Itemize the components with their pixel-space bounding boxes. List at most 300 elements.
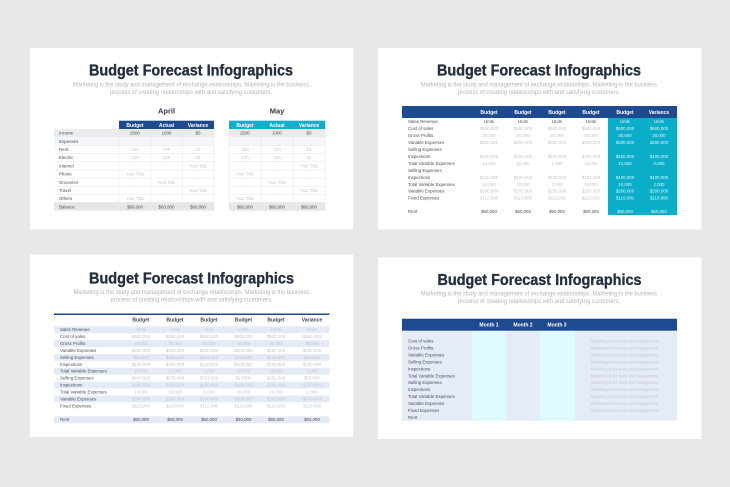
row labels: Selling Expenses	[60, 355, 94, 360]
table header labels	[132, 318, 323, 324]
column 4 values: Units	[586, 119, 597, 124]
column 5 values: $60,000	[268, 417, 284, 422]
column 3 values: $200,000	[548, 140, 567, 145]
column 2 values: $110,000	[514, 196, 533, 201]
column 2 values	[514, 119, 533, 214]
row labels: Cost of sales	[408, 338, 434, 344]
column 3 values	[548, 119, 567, 214]
column 5 values: $200,000	[616, 140, 635, 145]
April values: -	[197, 172, 199, 177]
column 3 values: $194,000	[200, 355, 219, 360]
column 1 values: $200,000	[132, 396, 151, 401]
column 3 values: $60,000	[201, 417, 217, 422]
row labels: Rent	[60, 417, 70, 422]
column 5 values	[267, 327, 286, 422]
column 1 values: $200,000	[480, 189, 499, 194]
subtitle: Marketing is the study and management of exchange relationships. Marketing is the business	[74, 289, 310, 296]
panel: April and May budget tables	[30, 48, 353, 230]
column 5 values: 10,000	[269, 369, 283, 374]
column 3 values: $100,000	[200, 362, 219, 367]
column 2 values: $200,000	[166, 348, 185, 353]
May values: 1000	[272, 131, 282, 136]
heading: May: May	[270, 106, 285, 116]
row labels: Inspections	[60, 362, 83, 367]
row labels: Rent	[408, 209, 418, 214]
column 1 values: $100,000	[132, 383, 151, 388]
variance values: $60,000	[651, 209, 667, 214]
row labels: Cost of sales	[60, 334, 86, 339]
column 2 values: $500,000	[166, 334, 185, 339]
April values: -	[197, 180, 199, 185]
row labels: Groceries	[59, 180, 79, 185]
column 1 values: $200,000	[480, 140, 499, 145]
column 4 values: $100,000	[234, 362, 253, 367]
row labels: Variable Expenses	[408, 352, 445, 357]
column 2 values: $60,000	[167, 417, 183, 422]
variance values: Units	[307, 327, 318, 332]
table header: Month 1	[479, 322, 499, 328]
panel: budget table with teal highlight	[378, 48, 702, 230]
column 4 values: Units	[238, 327, 249, 332]
column 5 values: $500,000	[616, 126, 635, 131]
column 5 values: $110,000	[616, 196, 635, 201]
row labels	[59, 131, 79, 209]
notes column: Marketing is the study and management.	[591, 352, 659, 357]
column 5 values: $100,000	[616, 175, 635, 180]
row labels: Variable Expenses	[60, 396, 97, 401]
notes column: Marketing is the study and management.	[591, 387, 659, 392]
row labels: Total Variable Expenses	[60, 369, 108, 374]
column 3 values: $753,000	[200, 376, 219, 381]
column 1 values: $100,000	[480, 154, 499, 159]
column 2 values: 10,000	[168, 390, 182, 394]
variance values: $200,000	[303, 396, 322, 401]
row labels: Inspections	[408, 175, 431, 180]
column 1 values: $200,000	[132, 348, 151, 353]
column 4 values	[582, 119, 601, 214]
table header: Month 3	[547, 322, 567, 328]
table header: Budget	[582, 110, 600, 116]
table header labels: Budget	[235, 318, 252, 324]
row labels: Fixed Expenses	[408, 408, 440, 413]
May values: -	[308, 180, 310, 185]
row labels: Variable Expenses	[408, 401, 445, 406]
column 5 values: $391,000	[267, 376, 286, 381]
column 2 values: $875,000	[166, 376, 185, 381]
column 3 values: 1,000	[204, 369, 215, 374]
subtitle	[74, 289, 310, 304]
column 5 values: $500,000	[267, 334, 286, 339]
row labels	[408, 119, 456, 214]
variance values: 30,000	[305, 341, 319, 346]
May values: -	[244, 163, 246, 168]
teal highlighted columns	[608, 118, 677, 215]
May values: -	[244, 188, 246, 193]
column 5 values	[616, 119, 635, 214]
May values	[236, 131, 319, 209]
row labels: Travel	[59, 188, 71, 193]
row backgrounds	[54, 129, 325, 211]
row labels: Sales Revenue	[408, 119, 438, 124]
April values: Your Title	[157, 180, 176, 185]
column 4 values: 10,000	[584, 161, 598, 166]
column 5 values: $200,000	[267, 348, 286, 353]
column 4 values: $500,000	[582, 126, 601, 131]
May table header	[229, 121, 325, 129]
column 2 values: Units	[518, 119, 529, 124]
panel: striped budget table	[30, 254, 353, 437]
April table header: Actual	[159, 123, 175, 129]
May values: $60,000	[269, 204, 285, 209]
column 4 values: $200,000	[582, 140, 601, 145]
May values: $60,000	[301, 204, 317, 209]
column 5 values: $100,000	[616, 154, 635, 159]
variance values: 2,000	[306, 390, 318, 394]
column 2 values: $100,000	[166, 383, 185, 388]
column 5 values: $60,000	[617, 209, 633, 214]
column 1 values: $60,000	[481, 209, 497, 214]
table header: Budget	[480, 110, 498, 116]
May values: -	[276, 188, 278, 193]
column 4 values: $500,000	[234, 334, 253, 339]
April values: 2500	[130, 131, 140, 136]
column backgrounds	[402, 331, 677, 421]
column 4 values: $60,000	[236, 417, 252, 422]
column 1 values: $110,000	[132, 403, 151, 408]
column 1 values: 30,000	[482, 133, 496, 138]
April values: -	[134, 180, 136, 185]
column 2 values: $200,000	[514, 140, 533, 145]
April values: -	[134, 188, 136, 193]
row labels: Sales Revenue	[60, 327, 90, 332]
column 4 values: $200,000	[234, 396, 253, 401]
row labels: Total Variable Expenses	[408, 394, 456, 399]
subtitle: Marketing is the study and management of exchange relationships. Marketing is the business	[73, 82, 310, 88]
April values: Your Title	[189, 163, 208, 168]
May table header: Actual	[269, 123, 285, 129]
column 2 values: 30,000	[516, 133, 530, 138]
May values: -	[276, 172, 278, 177]
column 5 values: 10,000	[269, 390, 283, 394]
May values: 340	[273, 155, 281, 160]
table header: Budget	[548, 110, 566, 116]
column 1 values: 30,000	[134, 341, 148, 346]
column 1 values: 10,000	[134, 390, 148, 394]
April values: $60,000	[159, 204, 175, 209]
variance values: $200,000	[303, 348, 322, 353]
column 3 values: $200,000	[200, 348, 219, 353]
column 2 values: $500,000	[514, 126, 533, 131]
column 3 values: $100,000	[548, 154, 567, 159]
title: Budget Forecast Infographics	[438, 272, 642, 289]
column 5 values: $200,000	[267, 396, 286, 401]
column 5 values: $535,000	[267, 355, 286, 360]
row labels: Inspections	[60, 383, 83, 388]
April values: Your Title	[126, 172, 145, 177]
column 2 values: $156,000	[166, 355, 185, 360]
row labels: Rent	[59, 147, 69, 152]
April values: 700	[163, 147, 171, 152]
column 3 values	[200, 327, 219, 422]
April table header: Variance	[188, 123, 209, 129]
April values	[126, 131, 208, 209]
notes column: Marketing is the study and management.	[591, 373, 659, 378]
April values: $60,000	[127, 204, 143, 209]
table header labels: Variance	[302, 318, 323, 324]
column 2 values: $100,000	[166, 362, 185, 367]
column 4 values: $150,000	[234, 355, 253, 360]
column 1 values: $500,000	[132, 334, 151, 339]
subtitle: Marketing is the study and management of exchange relationships. Marketing is the business	[421, 82, 658, 88]
May values: -	[276, 196, 278, 201]
May values: $60,000	[237, 204, 253, 209]
panel: monthly table	[378, 258, 702, 439]
column 4 values: $13,000	[236, 376, 252, 381]
column 5 values: 30,000	[618, 133, 632, 138]
column 4 values: $100,000	[582, 154, 601, 159]
row labels: Gross Profits	[408, 346, 434, 350]
row labels: Inspections	[408, 366, 431, 371]
column 3 values: $100,000	[548, 175, 567, 180]
April values: 250	[131, 147, 139, 152]
May values: 700	[273, 147, 281, 152]
column 2 values: 10,000	[516, 182, 530, 187]
row labels: Fixed Expenses	[408, 196, 440, 201]
April values: 340	[163, 155, 171, 160]
column 5 values: Units	[620, 119, 631, 124]
column 3 values: $200,000	[548, 189, 567, 194]
subtitle: process of creating relationships with and satisfying customers.	[458, 298, 620, 305]
row labels: Fixed Expenses	[60, 403, 92, 408]
April values: -	[166, 172, 168, 177]
row labels: Variable Expenses	[408, 140, 445, 145]
April table header: Budget	[126, 123, 144, 129]
May values: 100	[241, 155, 249, 160]
table header labels: Budget	[166, 318, 184, 324]
notes column: Marketing is the study and management.	[591, 359, 659, 364]
April values: 100	[131, 155, 139, 160]
title: Budget Forecast Infographics	[89, 62, 293, 80]
column 3 values: 30,000	[550, 133, 564, 138]
April values: -	[134, 163, 136, 168]
column 4 values: $200,000	[582, 189, 601, 194]
column 1 values: Units	[484, 119, 495, 124]
April values: -	[166, 196, 168, 201]
subtitle	[73, 82, 310, 96]
subtitle: Marketing is the study and management of exchange relationships. Marketing is the business	[421, 291, 658, 298]
table header: Budget	[514, 110, 532, 116]
May values: -	[244, 180, 246, 185]
column 2 values: $200,000	[514, 189, 533, 194]
table header: Budget	[616, 110, 634, 116]
row labels: Income	[59, 131, 74, 136]
column 3 values: $500,000	[548, 126, 567, 131]
column 2 values: 10,000	[168, 369, 182, 374]
April values: -	[197, 196, 199, 201]
variance values: $200,000	[650, 140, 669, 145]
May values: Your Title	[300, 188, 319, 193]
row labels: Rent	[408, 415, 418, 420]
May table header: Variance	[299, 123, 320, 129]
April values: 34	[196, 155, 201, 160]
row labels: Expenses	[59, 139, 79, 144]
column 3 values: $500,000	[200, 334, 219, 339]
column 5 values: 10,000	[618, 182, 632, 187]
row labels: Total Variable Expenses	[408, 373, 456, 378]
row labels: Total Variable Expenses	[408, 182, 456, 187]
notes column: Marketing is the study and management.	[591, 380, 659, 385]
column 5 values: $110,000	[267, 403, 286, 408]
column 2 values: $60,000	[515, 209, 531, 214]
notes column: Marketing is the study and management.	[591, 408, 659, 413]
row labels: Phone	[59, 172, 72, 177]
row labels: Selling Expenses	[408, 380, 442, 385]
column 4 values: $60,000	[583, 209, 599, 214]
April values: $0	[196, 131, 201, 136]
notes column	[591, 338, 659, 413]
table top rule	[54, 314, 330, 315]
May values: Your Title	[300, 163, 319, 168]
row labels: Inspections	[408, 154, 431, 159]
column 3 values: 1,000	[204, 390, 215, 394]
variance values: $42,000	[304, 355, 320, 360]
column 2 values: Units	[170, 327, 181, 332]
column 3 values: 1,000	[552, 161, 563, 166]
row labels: Others	[59, 196, 73, 201]
notes column: Marketing is the study and management.	[591, 366, 659, 371]
May values: Your Title	[236, 196, 255, 201]
title: Budget Forecast Infographics	[89, 270, 294, 288]
table header labels: Budget	[200, 318, 218, 324]
column 4 values	[234, 327, 253, 422]
row labels: Gross Profits	[60, 341, 86, 346]
column 5 values: $100,000	[267, 362, 286, 367]
variance values: $78,000	[304, 376, 320, 381]
row labels: Cost of sales	[408, 126, 434, 131]
variance values: 2,000	[654, 182, 665, 187]
row labels: Gross Profits	[408, 133, 434, 138]
column 1 values: $100,000	[480, 175, 499, 180]
column 5 values: Units	[271, 327, 282, 332]
row labels: Selling Expenses	[60, 376, 94, 381]
column 3 values: Units	[552, 119, 563, 124]
variance values: $500,000	[303, 334, 322, 339]
May values: -	[308, 172, 310, 177]
column 3 values: $100,000	[200, 383, 219, 388]
May table header: Budget	[236, 123, 254, 129]
subtitle: process of creating relationships with and satisfying customers.	[458, 89, 620, 96]
notes column: Marketing is the study and management.	[591, 394, 659, 399]
column 1 values: 10,000	[482, 182, 496, 187]
column 3 values: $110,000	[200, 403, 219, 408]
April values: Your Title	[126, 196, 145, 201]
column 3 values: Units	[204, 327, 215, 332]
subtitle: process of creating relationships with and satisfying customers.	[110, 89, 272, 96]
row labels: Internet	[59, 163, 75, 168]
column 2 values: $100,000	[514, 175, 533, 180]
May values: Your Title	[236, 172, 255, 177]
variance values: $200,000	[650, 189, 669, 194]
April table header	[119, 121, 214, 129]
May values: 15	[307, 147, 312, 152]
title: Budget Forecast Infographics	[437, 62, 641, 80]
row labels: Inspections	[408, 387, 431, 392]
column 2 values: $200,000	[166, 396, 185, 401]
column 4 values: $100,000	[582, 175, 601, 180]
heading: April: April	[158, 106, 175, 116]
table header labels: Budget	[132, 318, 150, 324]
May values: 34	[307, 155, 312, 160]
row labels: Total Variable Expenses	[60, 390, 108, 394]
row labels: Total Variable Expenses	[408, 161, 456, 166]
April values: Your Title	[189, 188, 208, 193]
column 1 values: Units	[136, 327, 147, 332]
variance values: $500,000	[650, 126, 669, 131]
variance values: $100,000	[650, 175, 669, 180]
column 5 values: $200,000	[616, 189, 635, 194]
variance values	[650, 119, 669, 214]
subtitle: process of creating relationships with and satisfying customers.	[110, 296, 273, 304]
column 3 values: 30,000	[202, 341, 216, 346]
column 4 values: $100,000	[234, 383, 253, 388]
row labels	[408, 338, 456, 420]
column 1 values: $447,000	[132, 376, 151, 381]
variance values: $100,000	[650, 154, 669, 159]
subtitle	[421, 82, 658, 96]
column 4 values: $110,000	[234, 403, 253, 408]
row labels: Variable Expenses	[60, 348, 97, 353]
May values: 2500	[240, 131, 250, 136]
variance values: $100,000	[303, 383, 322, 388]
column 3 values: $200,000	[200, 396, 219, 401]
May values: -	[276, 163, 278, 168]
variance values: Units	[654, 119, 665, 124]
May values: 250	[241, 147, 249, 152]
notes column: Marketing is the study and management.	[591, 401, 659, 406]
column 2 values	[166, 327, 185, 422]
table header	[402, 106, 677, 118]
May values: -	[308, 196, 310, 201]
column 2 values: $110,000	[166, 403, 185, 408]
table header: Month 2	[513, 322, 533, 328]
column 1 values: 10,000	[134, 369, 148, 374]
April values: 15	[196, 147, 201, 152]
variance values: 2,000	[306, 369, 318, 374]
column 1 values: 10,000	[482, 161, 496, 166]
row labels: Variable Expenses	[408, 189, 445, 194]
column 1 values: $110,000	[480, 196, 499, 201]
column 4 values: 30,000	[584, 133, 598, 138]
subtitle	[421, 291, 658, 305]
table header: Variance	[649, 110, 670, 116]
column 1 values: $500,000	[480, 126, 499, 131]
column 2 values: 10,000	[516, 161, 530, 166]
May values: $0	[307, 131, 312, 136]
column 3 values: $110,000	[548, 196, 567, 201]
row labels: Selling Expenses	[408, 359, 442, 364]
April values: $60,000	[190, 204, 206, 209]
variance values: $110,000	[650, 196, 669, 201]
table header	[402, 319, 677, 331]
notes column: Marketing is the study and management.	[591, 346, 659, 350]
variance values	[303, 327, 322, 422]
column 5 values: $100,000	[267, 383, 286, 388]
row labels	[60, 327, 108, 422]
April values: 1000	[162, 131, 172, 136]
column 3 values: 1,000	[552, 182, 563, 187]
column 3 values: $60,000	[549, 209, 565, 214]
column 1 values	[480, 119, 499, 214]
